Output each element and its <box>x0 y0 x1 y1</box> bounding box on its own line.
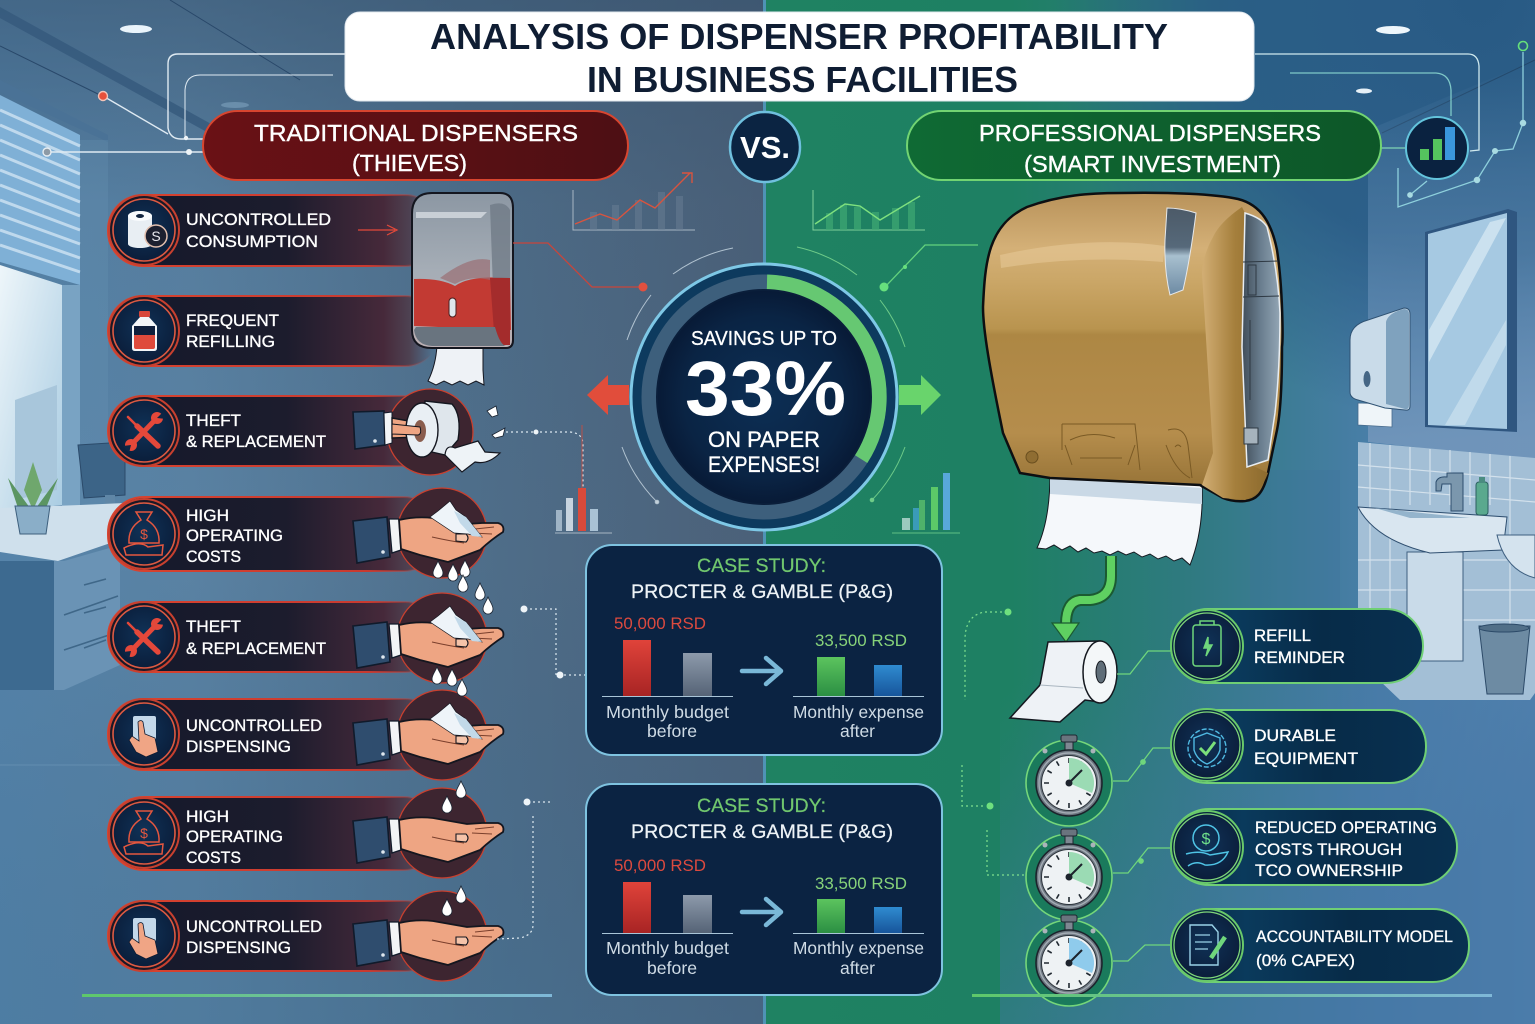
title <box>345 12 1254 101</box>
row: uncontrolled dispensing: DISPENSING <box>186 737 291 756</box>
icon: hand stealing paper roll <box>353 401 505 472</box>
heading: professional dispensers: PROFESSIONAL DISPENSERS <box>979 120 1321 146</box>
panel: case study one: CASE STUDY: <box>697 555 826 577</box>
panel: case study two: PROCTER & GAMBLE (P&G) <box>631 821 893 843</box>
icon: professional gold dispenser <box>983 193 1282 565</box>
panel: case study one: after <box>840 721 875 741</box>
panel: case study one: Monthly expense <box>793 702 924 722</box>
row: high operating costs repeat: OPERATING <box>186 827 283 846</box>
bottom rule right <box>972 994 1492 997</box>
savings callout circle: SAVINGS UP TO <box>691 328 837 350</box>
heading: traditional dispensers: (THIEVES) <box>352 150 467 176</box>
panel: benefit reduced operating costs: REDUCED OPERATING <box>1255 819 1437 837</box>
icon: hand tapping card <box>129 918 158 959</box>
icon: paper roll <box>1010 641 1117 722</box>
row: uncontrolled consumption <box>108 195 440 266</box>
plant <box>8 462 58 534</box>
row: uncontrolled dispensing <box>108 690 503 780</box>
panel: benefit accountability model: (0% CAPEX) <box>1256 952 1355 970</box>
sink <box>1358 473 1507 661</box>
panel: benefit accountability model: ACCOUNTABILITY MODEL <box>1256 928 1453 946</box>
paper sheet <box>1037 474 1202 565</box>
icon: money bag in hand <box>124 811 163 854</box>
savings callout circle: 33% <box>685 346 846 432</box>
icon: falling paper drops <box>432 560 493 916</box>
panel: case study one <box>586 545 942 755</box>
row: high operating costs repeat <box>108 788 503 878</box>
heading: professional dispensers <box>907 111 1381 180</box>
tile wall <box>1358 442 1535 700</box>
row: high operating costs: OPERATING <box>186 526 283 545</box>
panel: traditional dispenser drawbacks <box>108 195 505 981</box>
icon: money bag in hand: $ <box>140 526 148 542</box>
panel: benefit accountability model <box>1171 909 1469 982</box>
icon: money bag in hand <box>124 512 163 555</box>
panel: case study two: CASE STUDY: <box>697 795 826 817</box>
chart: green trend <box>813 190 925 230</box>
row: uncontrolled consumption: CONSUMPTION <box>186 232 318 251</box>
arrow: right green <box>899 375 941 415</box>
icon: coin in hand <box>1186 825 1228 866</box>
icon: document and pen <box>1190 925 1225 965</box>
arrow: before to after <box>742 658 781 684</box>
savings callout circle <box>631 264 897 530</box>
background: right restroom scene <box>765 0 1535 1024</box>
icon: hand with paper pile <box>353 703 503 765</box>
row: high operating costs repeat: COSTS <box>186 848 241 867</box>
arrow: left red <box>587 375 629 415</box>
center divider line <box>763 0 766 1024</box>
panel: case study two: 50,000 RSD <box>614 856 706 875</box>
row: uncontrolled dispensing repeat <box>108 891 503 981</box>
panel: case study one: PROCTER & GAMBLE (P&G) <box>631 581 893 603</box>
row: uncontrolled dispensing: UNCONTROLLED <box>186 716 322 735</box>
savings callout circle: ON PAPER <box>708 427 820 452</box>
row: theft and replacement: & REPLACEMENT <box>186 432 326 451</box>
row: uncontrolled dispensing repeat: DISPENSING <box>186 938 291 957</box>
icon: empty hand with drops <box>353 817 503 863</box>
icon: gear shield <box>1188 729 1226 767</box>
icon: paper roll with coin <box>128 211 167 248</box>
chart: red trend <box>573 173 695 230</box>
connector: green line to savings circle <box>880 245 978 292</box>
wall <box>1368 60 1535 460</box>
mirror <box>1425 209 1517 432</box>
panel: case study two: 33,500 RSD <box>815 874 907 893</box>
icon: money bag in hand: $ <box>140 825 148 841</box>
panel: case study one: 50,000 RSD <box>614 614 706 633</box>
panel: benefit reduced operating costs: COSTS THROUGH <box>1255 841 1402 859</box>
icon: hand with paper pile <box>353 501 503 563</box>
panel: benefit refill reminder: REMINDER <box>1254 648 1345 667</box>
decorative circuit lines right <box>1255 42 1528 207</box>
decorative circuit lines left <box>43 54 345 156</box>
panel: benefit refill reminder <box>1171 609 1423 683</box>
vs badge <box>730 112 800 182</box>
row: theft and replacement <box>108 389 505 475</box>
waste bin <box>1479 624 1530 694</box>
embossed pictogram <box>1062 424 1192 478</box>
panel: benefit durable equipment: DURABLE <box>1254 726 1336 745</box>
bottom rule left <box>82 994 552 997</box>
row: high operating costs <box>108 488 503 578</box>
icon: empty hand with drops <box>353 920 503 966</box>
icon: crossed tools <box>123 617 166 659</box>
row: high operating costs: COSTS <box>186 547 241 566</box>
panel: case study one: before <box>647 721 697 741</box>
heading: traditional dispensers <box>203 111 628 180</box>
row: theft and replacement repeat: THEFT <box>186 617 241 636</box>
bar chart: after <box>793 899 924 934</box>
row: theft and replacement: THEFT <box>186 411 241 430</box>
icon: coin in hand: $ <box>1202 831 1211 848</box>
panel: case study two: Monthly expense <box>793 938 924 958</box>
arrow: paper to roll <box>1052 556 1111 642</box>
row: theft and replacement repeat <box>108 593 503 683</box>
panel: case study two <box>586 784 942 995</box>
bar chart: before <box>602 882 733 934</box>
chart: small red bars <box>555 425 612 533</box>
icon: growth chart badge <box>1406 117 1468 179</box>
row: uncontrolled consumption: UNCONTROLLED <box>186 210 331 229</box>
background: left office scene <box>0 0 765 1024</box>
row: frequent refilling <box>108 296 440 366</box>
decorative arcs around circle <box>622 247 905 504</box>
heading: traditional dispensers: TRADITIONAL DISPENSERS <box>254 120 578 146</box>
icon: hand with paper pile <box>353 606 503 668</box>
icon: stopwatch two <box>1026 829 1112 920</box>
dotted connectors <box>497 430 1026 939</box>
row: uncontrolled dispensing repeat: UNCONTROLLED <box>186 917 322 936</box>
row: high operating costs: HIGH <box>186 506 229 525</box>
heading: professional dispensers: (SMART INVESTMENT) <box>1024 151 1281 177</box>
panel: case study one: Monthly budget <box>606 702 729 722</box>
icon: stopwatch one <box>1026 735 1112 826</box>
panel: benefit durable equipment: EQUIPMENT <box>1254 749 1358 768</box>
icon: bottle <box>132 311 157 351</box>
panel: case study two: after <box>840 958 875 978</box>
row: high operating costs repeat: HIGH <box>186 807 229 826</box>
panel: case study two: before <box>647 958 697 978</box>
window <box>0 265 62 512</box>
icon: stopwatch three <box>1026 915 1112 1006</box>
icon: paper roll with coin: S <box>151 228 161 244</box>
savings callout circle: EXPENSES! <box>708 452 820 477</box>
bar chart: after <box>793 657 924 696</box>
row: theft and replacement repeat: & REPLACEMENT <box>186 639 326 658</box>
icon: traditional dispenser <box>412 193 513 385</box>
icon: hand tapping card <box>129 716 158 757</box>
row: frequent refilling: REFILLING <box>186 332 275 351</box>
panel: benefit reduced operating costs <box>1171 809 1457 885</box>
connector: red line to savings circle <box>513 243 648 292</box>
row: frequent refilling: FREQUENT <box>186 311 279 330</box>
icon: crossed tools <box>123 411 166 453</box>
small wall dispenser <box>1350 308 1410 427</box>
title: IN BUSINESS FACILITIES <box>587 59 1018 100</box>
chart: small green bars <box>892 473 960 533</box>
icon: battery <box>1193 621 1221 666</box>
monitor and desk <box>78 442 125 498</box>
vs badge: VS. <box>740 130 790 165</box>
title: ANALYSIS OF DISPENSER PROFITABILITY <box>430 16 1168 57</box>
panel: case study two: Monthly budget <box>606 938 729 958</box>
arrow: before to after <box>742 899 781 925</box>
panel: case study one: 33,500 RSD <box>815 631 907 650</box>
panel: benefit durable equipment <box>1171 709 1426 783</box>
connectors to benefits <box>1113 651 1172 961</box>
panel: benefit reduced operating costs: TCO OWNERSHIP <box>1255 862 1403 880</box>
bar chart: before <box>602 640 733 696</box>
panel: benefit refill reminder: REFILL <box>1254 626 1311 645</box>
